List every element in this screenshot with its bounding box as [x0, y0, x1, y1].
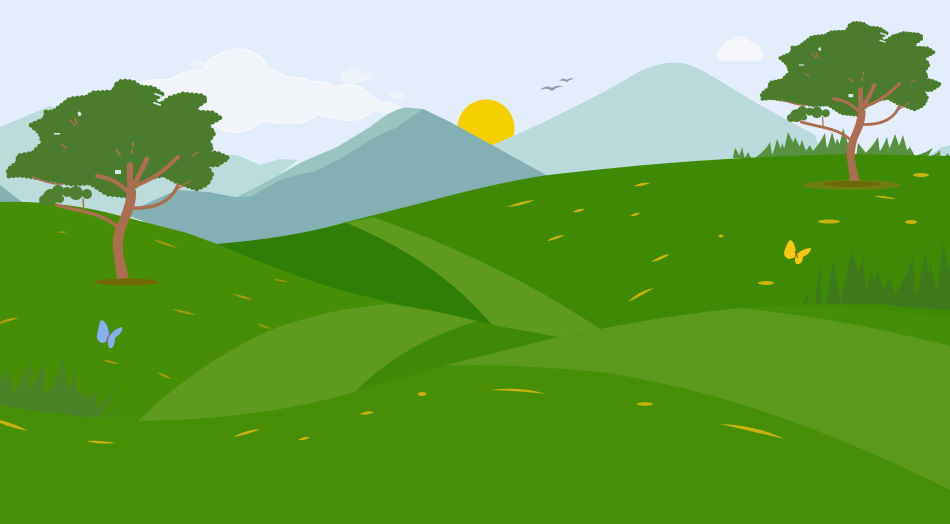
- tree right: [762, 23, 940, 190]
- left hill: [0, 202, 492, 440]
- path stripe: [347, 217, 600, 337]
- grass leaves: [0, 173, 929, 444]
- butterfly yellow: [784, 240, 811, 264]
- big mountain: [490, 63, 830, 190]
- distant right mountain: [920, 145, 950, 170]
- small clouds: [189, 60, 405, 99]
- middle dark wedge: [355, 321, 558, 392]
- low dark mountains: [0, 185, 300, 250]
- birds: [540, 78, 574, 91]
- right mid band: [740, 306, 950, 360]
- back right hill: [217, 154, 950, 524]
- far mountains: [0, 106, 298, 240]
- foreground hill: [0, 365, 950, 524]
- grass behind right tree: [733, 128, 950, 158]
- dark valley: [217, 223, 492, 325]
- tree left: [8, 81, 228, 286]
- middle mountain: [230, 107, 548, 250]
- butterfly blue: [97, 320, 122, 348]
- left light patch: [138, 304, 477, 421]
- big cloud: [140, 49, 401, 132]
- grass left: [0, 357, 125, 420]
- grass right: [803, 242, 950, 310]
- right light hill: [442, 308, 950, 500]
- cloud right: [717, 36, 764, 61]
- sun: [458, 100, 514, 156]
